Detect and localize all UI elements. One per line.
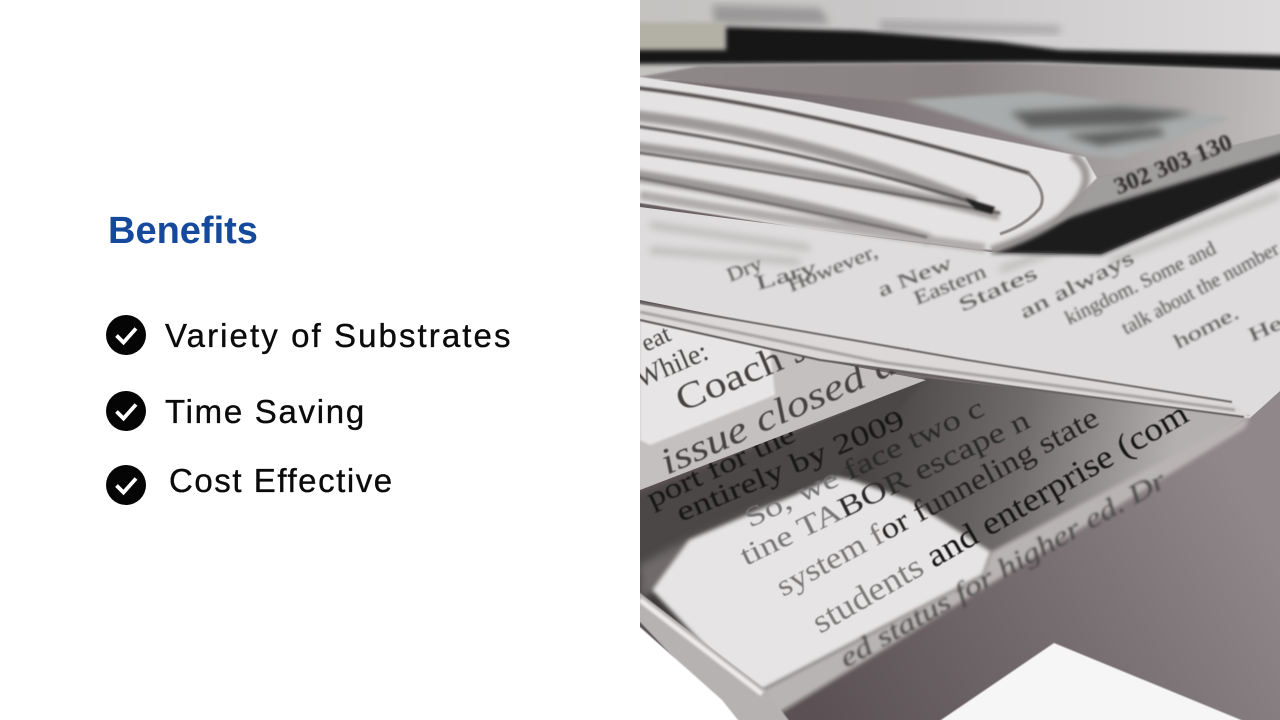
- lower page text: entirely by 2009: [672, 404, 909, 528]
- lower-left newspaper page: issue closed ar: [654, 335, 920, 483]
- page text: Dry: [724, 253, 765, 287]
- sunlit patch on table: [938, 643, 1246, 720]
- lower page text: tine TABOR escape n: [735, 404, 1035, 572]
- folded newspaper pages: [600, 68, 1097, 250]
- heading: Benefits: Benefits: [108, 210, 258, 252]
- photo: stacked newspapers: [640, 0, 1280, 720]
- list item: Cost Effective: [106, 462, 394, 505]
- page text: States: [955, 262, 1041, 317]
- lower page text: So, we face two c: [740, 393, 989, 534]
- paper shadow edge at left: [600, 378, 926, 590]
- page text: Lary: [753, 257, 819, 295]
- page text: an always: [1016, 247, 1138, 323]
- lower page text: students and enterprise (com: [806, 396, 1195, 641]
- lower-left newspaper page: [600, 310, 926, 505]
- page text: However,: [785, 241, 881, 297]
- page text: talk about the number: [1118, 238, 1280, 339]
- middle newspaper page: [600, 161, 1280, 418]
- middle page folded edge: [600, 296, 1250, 418]
- cast shadow of fold: [991, 141, 1280, 255]
- list item: Variety of Substrates: Variety of Substrates: [165, 317, 513, 354]
- top newspaper, out of focus: [600, 0, 1280, 80]
- lower page text: ed status for higher ed. Dr: [834, 465, 1172, 673]
- page text: a New: [875, 252, 956, 302]
- lower newspaper: [600, 378, 1250, 720]
- list item: Time Saving: Time Saving: [165, 393, 366, 430]
- lower page text: port for the: [642, 419, 800, 514]
- page text: He: [1245, 312, 1280, 347]
- folded newspaper top surface and spine: 302 303 130: [1111, 130, 1236, 201]
- page text: home.: [1170, 302, 1243, 353]
- fold shadow stripes: [600, 112, 999, 248]
- list item: Cost Effective: Cost Effective: [169, 462, 394, 499]
- lower page text: [642, 393, 1195, 673]
- page text: [724, 237, 1280, 353]
- lower page fold band: [600, 575, 790, 720]
- sunlit part of lower page: [652, 477, 991, 690]
- lower page edge strip: [762, 415, 1250, 716]
- lower-left newspaper page: Coach Je: [669, 320, 833, 420]
- table surface: [640, 0, 1280, 720]
- folded newspaper top surface and spine: [600, 63, 1280, 228]
- light table corner: [600, 625, 742, 720]
- page text: kingdom. Some and: [1062, 237, 1219, 329]
- page text: Eastern: [911, 261, 989, 310]
- lower page text: system for funneling state: [771, 401, 1104, 603]
- panel: benefits text: [0, 0, 640, 720]
